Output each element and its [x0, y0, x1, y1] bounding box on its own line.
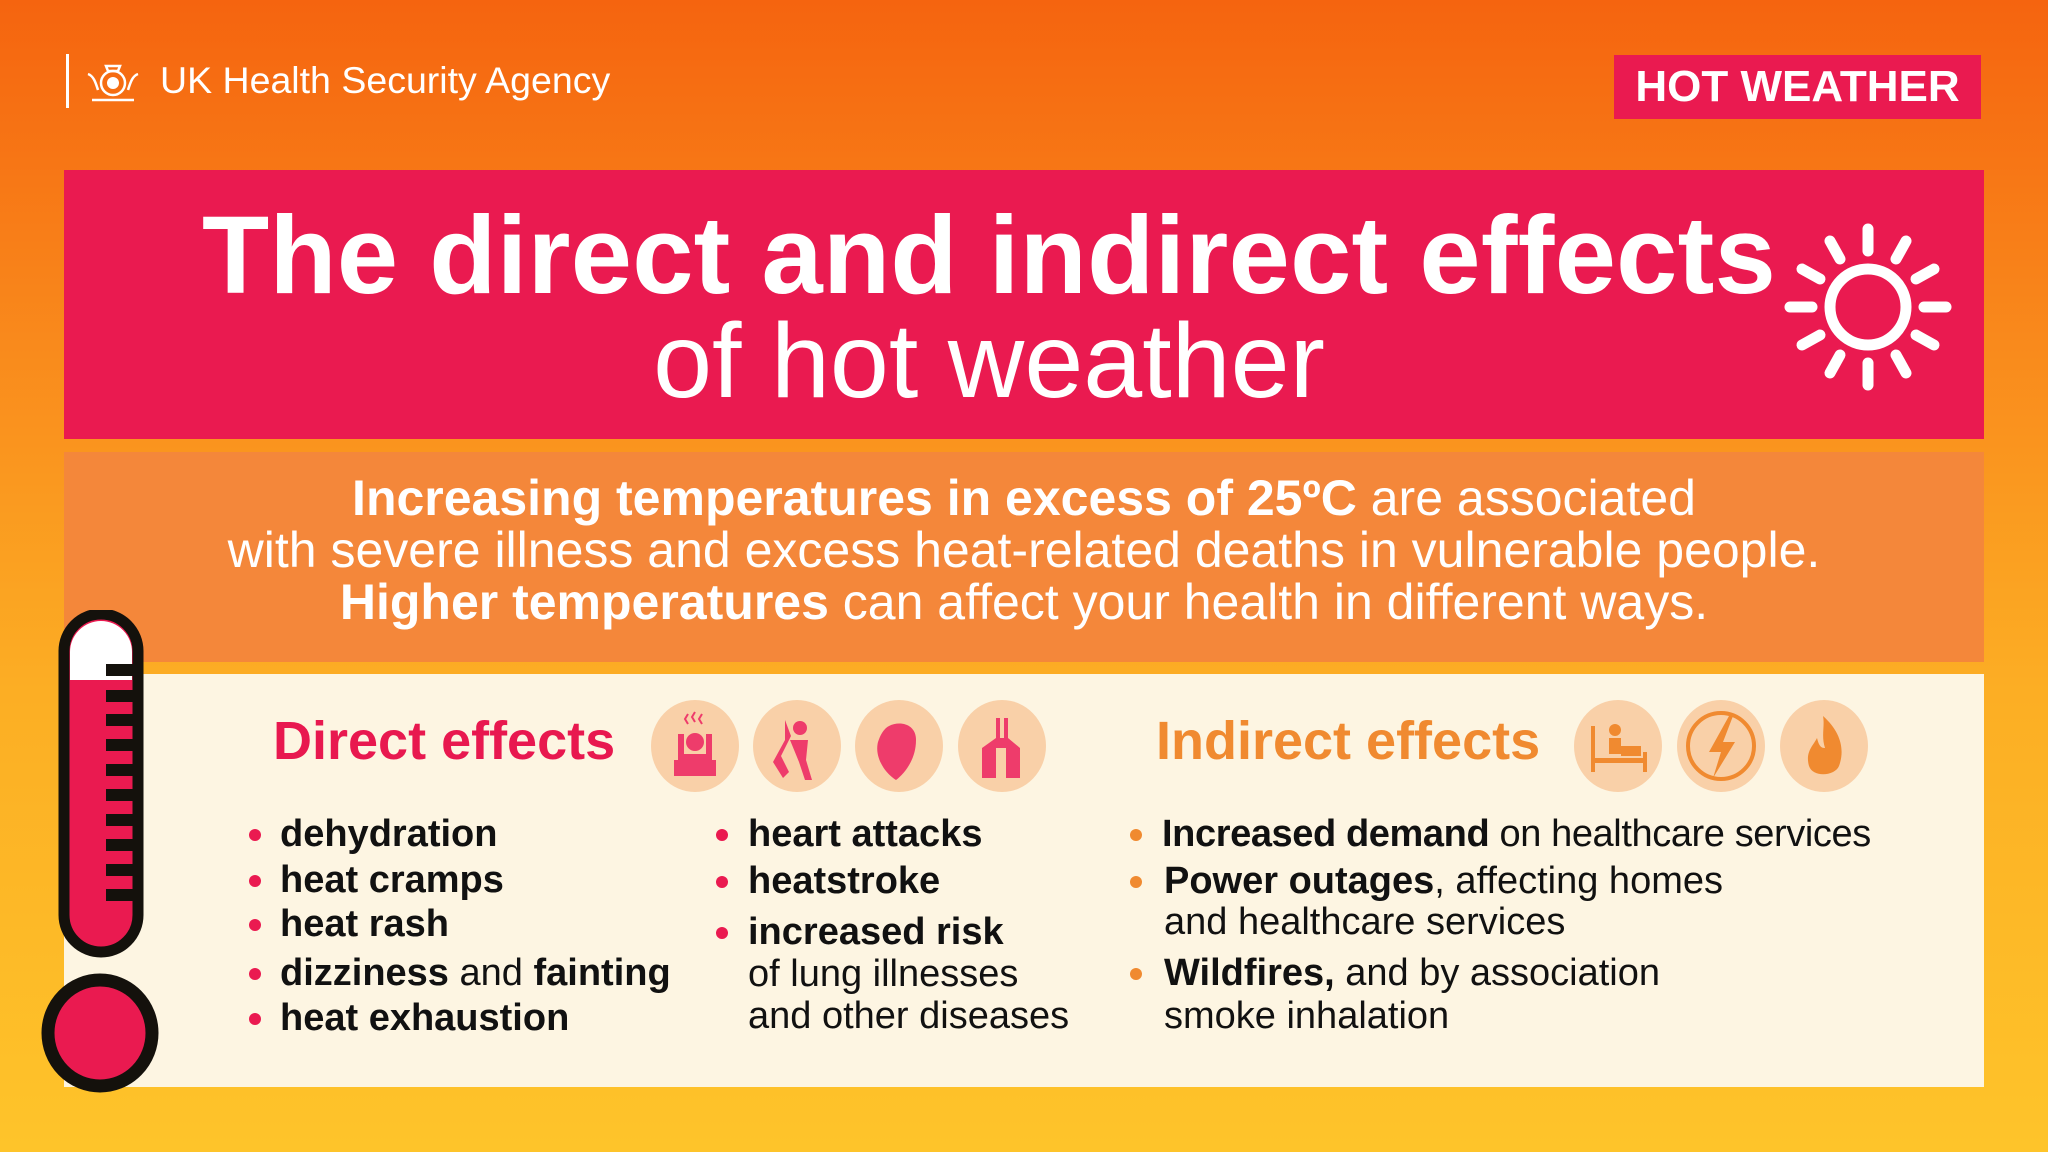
icons: indirect effects	[1574, 700, 1868, 792]
text block: intro	[228, 470, 1820, 630]
badge: HOT WEATHER	[1614, 55, 1981, 119]
heading: title line 1: The direct and indirect effects	[202, 194, 1776, 317]
icons: direct effects	[651, 700, 1046, 792]
logo: UK Health Security Agency	[66, 54, 610, 108]
list: indirect effects: Power outages, affecting homes	[1164, 860, 1723, 902]
list: direct effects column 2: increased risk	[748, 911, 1004, 953]
list: direct effects column 1: heat exhaustion	[280, 997, 569, 1039]
list: direct effects column 2: of lung illnesses	[748, 953, 1018, 995]
list: direct effects column 1: dizziness and fainting	[280, 952, 671, 994]
panel: intro text	[64, 452, 1984, 662]
list: indirect effects: Wildfires, and by association	[1164, 952, 1660, 994]
list: direct effects column 1: heat rash	[280, 903, 449, 945]
panel: title	[64, 170, 1984, 439]
icon: thermometer	[42, 610, 158, 1092]
list: direct effects column 1: heat cramps	[280, 859, 504, 901]
heading: Indirect effects: Indirect effects	[1156, 711, 1540, 771]
list: indirect effects: smoke inhalation	[1164, 995, 1449, 1037]
list: direct effects column 2	[716, 813, 1069, 1037]
text block: intro: Increasing temperatures in excess of 25ºC are associated	[352, 470, 1696, 526]
text block: intro: Higher temperatures can affect your health in different ways.	[340, 574, 1708, 630]
list: direct effects column 1: dehydration	[280, 813, 497, 855]
logo: UK Health Security Agency: UK Health Security Agency	[160, 59, 610, 101]
icon: royal crest	[88, 64, 138, 102]
list: indirect effects: and healthcare services	[1164, 901, 1565, 943]
panel: effects	[64, 674, 1984, 1087]
icon: sun	[1784, 224, 1952, 390]
heading: Direct effects: Direct effects	[273, 711, 615, 771]
text block: intro: with severe illness and excess heat-related deaths in vulnerable people.	[228, 522, 1820, 578]
list: direct effects column 2: and other diseases	[748, 995, 1069, 1037]
list: direct effects column 2: heart attacks	[748, 813, 982, 855]
list: indirect effects: Increased demand on healthcare services	[1162, 813, 1871, 855]
list: direct effects column 1	[249, 813, 671, 1039]
list: indirect effects	[1130, 813, 1871, 1037]
badge: HOT WEATHER: HOT WEATHER	[1635, 62, 1960, 111]
list: direct effects column 2: heatstroke	[748, 860, 940, 902]
heading: title line 2: of hot weather	[653, 302, 1325, 420]
